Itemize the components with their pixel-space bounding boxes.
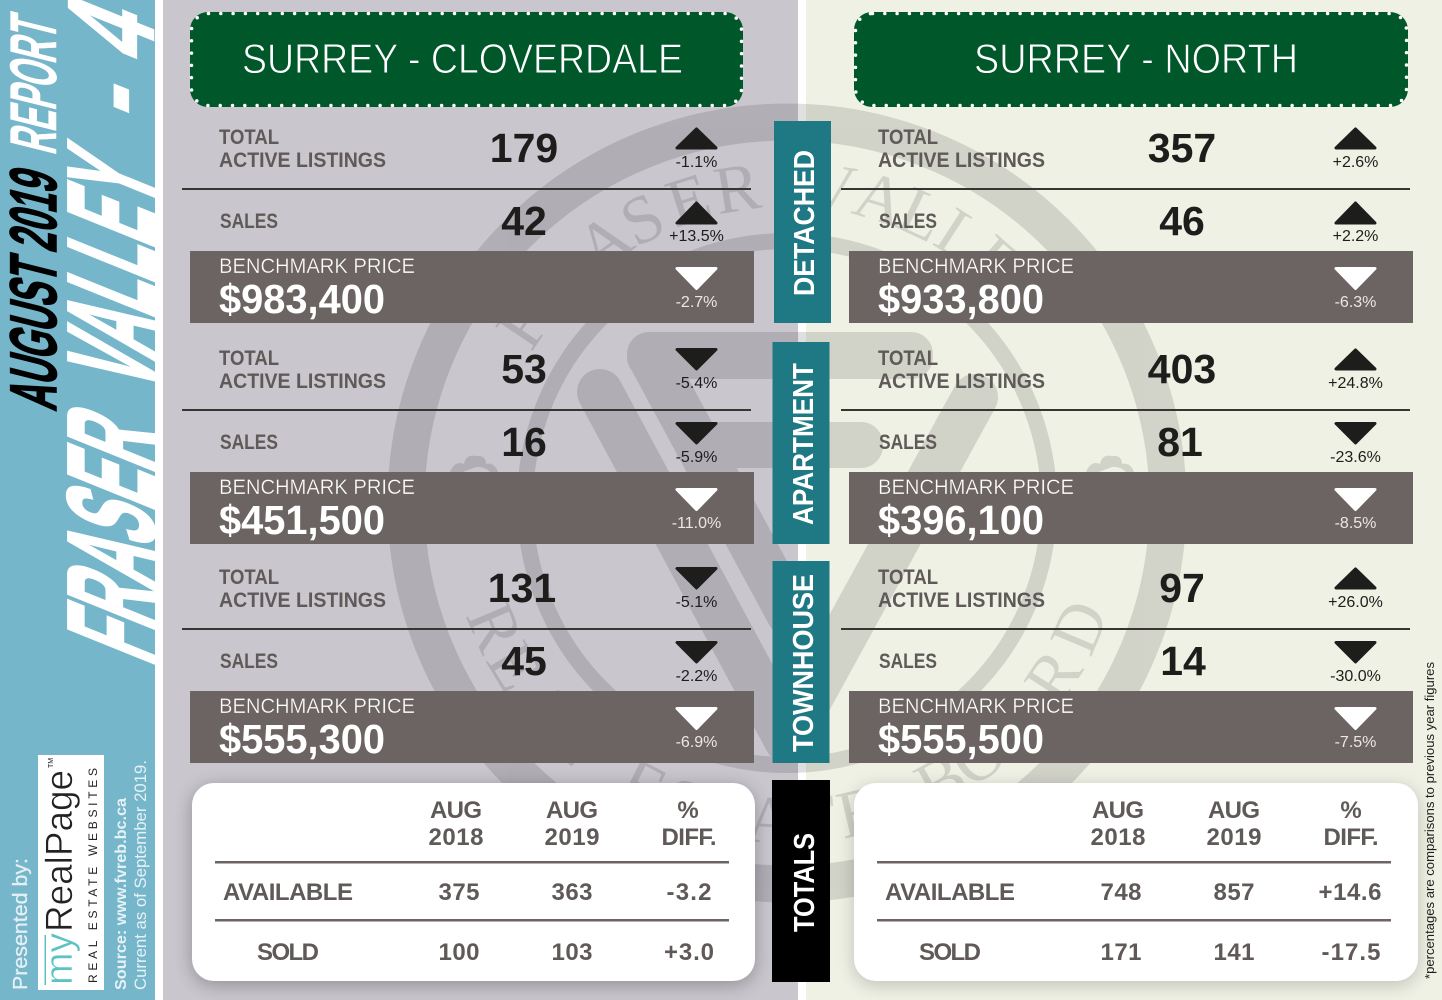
- panel: cloverdale detached: 179: [490, 125, 558, 171]
- panel: north townhouse: 14: [1160, 638, 1206, 684]
- watermark: fraser valley real estate board seal: E: [956, 220, 1037, 305]
- card: north totals: 171: [1100, 939, 1142, 966]
- banner: surrey north: SURREY - NORTH: [974, 35, 1298, 82]
- watermark: fraser valley real estate board seal: F: [480, 288, 565, 362]
- watermark: fraser valley real estate board seal: A: [562, 196, 646, 287]
- card: cloverdale totals: 2018: [428, 824, 484, 851]
- watermark: fraser valley real estate board seal: [406, 122, 1168, 884]
- logo: myrealpage: RealPage: [39, 770, 81, 932]
- panel: cloverdale townhouse: ACTIVE LISTINGS: [219, 589, 386, 612]
- sidebar: [0, 0, 179, 1000]
- card: north totals: 748: [1100, 879, 1142, 906]
- card: cloverdale totals: DIFF.: [662, 824, 716, 851]
- panel: cloverdale townhouse: -5.1%: [676, 594, 717, 611]
- watermark: fraser valley real estate board seal: E: [830, 770, 887, 854]
- panel: cloverdale detached: +13.5%: [669, 228, 724, 245]
- panel: north townhouse: $555,500: [878, 716, 1044, 762]
- panel: cloverdale detached: 42: [501, 198, 547, 244]
- watermark: fraser valley real estate board seal: V: [802, 146, 861, 228]
- panel: north townhouse: [841, 565, 1413, 763]
- panel: cloverdale apartment: -5.4%: [676, 375, 717, 392]
- panel: cloverdale townhouse: -2.2%: [676, 668, 717, 685]
- panel: north townhouse: -7.5%: [1335, 734, 1376, 751]
- category: apartment: [772, 342, 830, 544]
- heading: fraser valley 4: FRASER: [42, 388, 179, 677]
- panel: cloverdale apartment: -11.0%: [672, 515, 721, 532]
- category: detached: [774, 121, 831, 323]
- panel: north apartment: ACTIVE LISTINGS: [878, 370, 1045, 393]
- watermark: fraser valley real estate board seal: A: [744, 780, 797, 859]
- panel: cloverdale townhouse: $555,300: [219, 716, 385, 762]
- panel: north townhouse: -30.0%: [1330, 668, 1381, 685]
- watermark: fraser valley real estate board seal: B: [902, 736, 979, 824]
- card: cloverdale totals: SOLD: [257, 939, 319, 966]
- panel: cloverdale townhouse: -6.9%: [676, 734, 717, 751]
- panel: north townhouse: SALES: [879, 650, 937, 673]
- panel: cloverdale detached: SALES: [220, 210, 278, 233]
- category: totals: TOTALS: [789, 833, 821, 932]
- panel: cloverdale detached: TOTAL: [219, 126, 279, 149]
- category: apartment: APARTMENT: [788, 363, 820, 525]
- panel: cloverdale apartment: BENCHMARK PRICE: [219, 476, 415, 499]
- panel: cloverdale townhouse: [182, 565, 754, 763]
- panel: north apartment: [841, 346, 1413, 544]
- panel: north townhouse: +26.0%: [1328, 594, 1383, 611]
- panel: north townhouse: BENCHMARK PRICE: [878, 695, 1074, 718]
- logo: myrealpage: [38, 755, 104, 990]
- card: north totals: 141: [1214, 939, 1254, 966]
- panel: cloverdale townhouse: BENCHMARK PRICE: [219, 695, 415, 718]
- panel: cloverdale apartment: [182, 346, 754, 544]
- card: north totals: AUG: [1092, 797, 1144, 824]
- card: north totals: [854, 783, 1418, 985]
- watermark: fraser valley real estate board seal: T: [791, 779, 839, 858]
- card: cloverdale totals: +3.0: [664, 939, 714, 966]
- card: cloverdale totals: 100: [438, 939, 480, 966]
- card: cloverdale totals: 103: [552, 939, 592, 966]
- panel: north detached: +2.2%: [1333, 228, 1378, 245]
- category: townhouse: [772, 561, 830, 763]
- panel: north detached: TOTAL: [878, 126, 938, 149]
- panel: cloverdale detached: ACTIVE LISTINGS: [219, 149, 386, 172]
- panel: north apartment: +24.8%: [1328, 375, 1383, 392]
- watermark: fraser valley real estate board seal: E: [607, 742, 679, 829]
- watermark: fraser valley real estate board seal: D: [1034, 589, 1123, 664]
- watermark: fraser valley real estate board seal: O: [935, 711, 1020, 801]
- panel: cloverdale apartment: SALES: [220, 431, 278, 454]
- panel: north apartment: $396,100: [878, 497, 1044, 543]
- heading: fraser valley 4: -: [42, 51, 179, 136]
- card: cloverdale totals: AUG: [546, 797, 598, 824]
- watermark: fraser valley real estate board seal: R: [514, 238, 601, 324]
- panel: cloverdale detached: -2.7%: [676, 294, 717, 311]
- panel: north apartment: 403: [1148, 346, 1216, 392]
- card: north totals: AVAILABLE: [885, 879, 1015, 906]
- text: source: Source: www.fvreb.bc.ca: [113, 798, 130, 990]
- panel: cloverdale detached: $983,400: [219, 276, 385, 322]
- card: north totals: -17.5: [1322, 939, 1380, 966]
- panel: north detached: -6.3%: [1335, 294, 1376, 311]
- panel: north apartment: 81: [1157, 419, 1203, 465]
- panel: cloverdale apartment: TOTAL: [219, 347, 279, 370]
- panel: north detached: 357: [1148, 125, 1216, 171]
- card: cloverdale totals: AUG: [430, 797, 482, 824]
- watermark: fraser valley real estate board seal: L: [887, 171, 957, 257]
- logo: myrealpage: REAL ESTATE WEBSITES: [86, 768, 100, 983]
- panel: cloverdale apartment: 53: [501, 346, 547, 392]
- watermark: fraser valley real estate board seal: S: [654, 761, 714, 845]
- card: cloverdale totals: 375: [438, 879, 480, 906]
- panel: north detached: ACTIVE LISTINGS: [878, 149, 1045, 172]
- panel: cloverdale townhouse: 45: [501, 638, 547, 684]
- panel: north detached: BENCHMARK PRICE: [878, 255, 1074, 278]
- card: cloverdale totals: 2019: [544, 824, 600, 851]
- card: north totals: DIFF.: [1324, 824, 1378, 851]
- text: current date: Current as of September 2019.: [131, 760, 150, 990]
- panel: north detached: [841, 125, 1413, 323]
- panel: cloverdale townhouse: 131: [488, 565, 556, 611]
- card: north totals: 857: [1214, 879, 1254, 906]
- card: cloverdale totals: 363: [552, 879, 592, 906]
- watermark: fraser valley real estate board seal: L: [923, 192, 999, 279]
- watermark: fraser valley real estate board seal: E: [657, 157, 720, 242]
- card: cloverdale totals: AVAILABLE: [223, 879, 353, 906]
- card: north totals: 2018: [1090, 824, 1146, 851]
- panel: north apartment: BENCHMARK PRICE: [878, 476, 1074, 499]
- banner: surrey cloverdale: [190, 12, 743, 107]
- watermark: fraser valley real estate board seal: Y: [986, 255, 1076, 341]
- card: cloverdale totals: [192, 783, 755, 985]
- card: north totals: %: [1340, 797, 1362, 824]
- panel: cloverdale apartment: 16: [501, 419, 547, 465]
- panel: cloverdale detached: -1.1%: [676, 154, 717, 171]
- card: north totals: SOLD: [919, 939, 981, 966]
- panel: cloverdale detached: BENCHMARK PRICE: [219, 255, 415, 278]
- watermark: fraser valley real estate board seal: R: [709, 147, 766, 229]
- panel: cloverdale apartment: ACTIVE LISTINGS: [219, 370, 386, 393]
- card: north totals: +14.6: [1318, 879, 1382, 906]
- panel: surrey cloverdale background: [163, 0, 798, 1000]
- panel: north detached: SALES: [879, 210, 937, 233]
- panel: surrey north background: [806, 0, 1442, 1000]
- watermark: fraser valley real estate board seal: A: [846, 154, 915, 241]
- card: cloverdale totals: -3.2: [666, 879, 712, 906]
- watermark: fraser valley real estate board seal: R: [1009, 635, 1097, 715]
- panel: north apartment: -23.6%: [1330, 449, 1381, 466]
- category: totals: [772, 780, 830, 982]
- panel: north detached: +2.6%: [1333, 154, 1378, 171]
- panel: north apartment: TOTAL: [878, 347, 938, 370]
- watermark: fraser valley real estate board seal: S: [608, 176, 676, 261]
- panel: north apartment: -8.5%: [1335, 515, 1376, 532]
- banner: surrey north: [854, 12, 1408, 107]
- panel: north apartment: SALES: [879, 431, 937, 454]
- card: cloverdale totals: %: [677, 797, 699, 824]
- panel: cloverdale apartment: $451,500: [219, 497, 385, 543]
- panel: cloverdale apartment: -5.9%: [676, 449, 717, 466]
- panel: north townhouse: ACTIVE LISTINGS: [878, 589, 1045, 612]
- card: north totals: AUG: [1208, 797, 1260, 824]
- watermark: fraser valley real estate board seal: E: [472, 629, 559, 704]
- watermark: fraser valley real estate board seal: R: [451, 591, 539, 663]
- logo: myrealpage: TM: [48, 758, 55, 768]
- panel: cloverdale townhouse: SALES: [220, 650, 278, 673]
- panel: north townhouse: TOTAL: [878, 566, 938, 589]
- banner: surrey cloverdale: SURREY - CLOVERDALE: [242, 35, 683, 82]
- panel: cloverdale detached: [182, 125, 754, 323]
- category: townhouse: TOWNHOUSE: [788, 574, 820, 752]
- category: detached: DETACHED: [789, 150, 821, 296]
- panel: cloverdale townhouse: TOTAL: [219, 566, 279, 589]
- card: north totals: 2019: [1206, 824, 1262, 851]
- panel: north detached: 46: [1159, 198, 1205, 244]
- panel: north townhouse: 97: [1159, 565, 1205, 611]
- watermark: fraser valley real estate board seal: L: [534, 696, 616, 781]
- watermark: fraser valley real estate board seal: A: [499, 664, 589, 750]
- footnote: *percentages are comparisons to previous year figures: [1422, 662, 1437, 979]
- text: presented by: Presented by:: [10, 858, 32, 990]
- panel: north detached: $933,800: [878, 276, 1044, 322]
- logo: myrealpage: my: [38, 933, 81, 985]
- watermark: fraser valley real estate board seal: T: [699, 773, 754, 855]
- watermark: fraser valley real estate board seal: A: [971, 679, 1059, 767]
